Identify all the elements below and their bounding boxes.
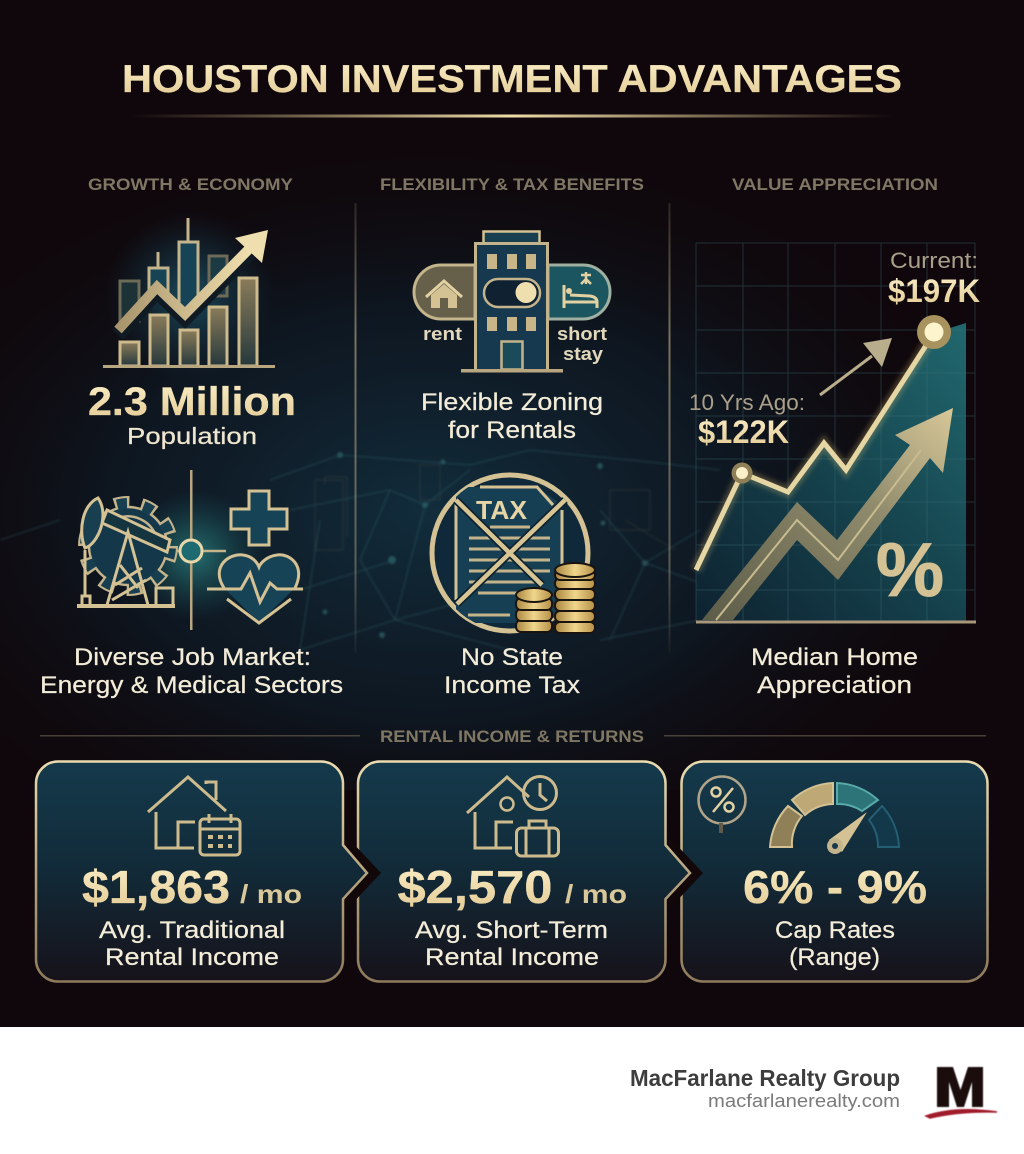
icon: short stay pill: short <box>557 324 607 344</box>
panel: cap rates card: (Range) <box>789 944 880 971</box>
panel: cap rates card <box>682 762 988 982</box>
icon: medical cross <box>231 491 287 545</box>
panel: traditional rental card: / mo <box>240 879 302 909</box>
data point: 10 years ago <box>732 462 752 484</box>
panel: traditional rental card <box>36 762 367 982</box>
text: diverse job market: Energy & Medical Sectors <box>40 672 343 699</box>
logo <box>926 1067 997 1118</box>
panel: short-term rental card: / mo <box>565 879 627 909</box>
label: ten years ago value: $122K <box>698 414 789 450</box>
text: flexible zoning: Flexible Zoning <box>421 389 603 416</box>
footer company name: MacFarlane Realty Group <box>630 1065 900 1091</box>
arrow: trend pointer <box>820 338 892 395</box>
text: median home appreciation: Median Home <box>751 644 918 671</box>
icon: heart with pulse <box>207 555 303 623</box>
icon: percent badge <box>698 776 746 833</box>
label: current value: Current: <box>890 248 978 273</box>
icon: no tax document with coins <box>432 475 595 633</box>
label: current value <box>888 248 980 309</box>
footer website: macfarlanerealty.com <box>708 1090 900 1111</box>
icon: short stay pill: stay <box>563 344 603 364</box>
icon: rent pill <box>414 265 475 344</box>
footer band <box>0 1027 1024 1154</box>
icon: flexible zoning building <box>414 232 610 372</box>
section heading: growth and economy: GROWTH & ECONOMY <box>88 175 294 194</box>
icon: skyline growth chart <box>103 210 275 380</box>
stat: population <box>88 380 296 449</box>
icon: energy and medical <box>77 470 303 630</box>
panel: traditional rental card: $1,863 <box>82 861 230 913</box>
title: HOUSTON INVESTMENT ADVANTAGES <box>122 58 902 101</box>
background network pattern <box>0 450 720 650</box>
text: median home appreciation: Appreciation <box>757 672 912 699</box>
text: median home appreciation <box>751 644 918 699</box>
data point: current <box>917 315 951 349</box>
stat: population: 2.3 Million <box>88 380 296 424</box>
panel: cap rates card: 6% - 9% <box>743 861 927 913</box>
line chart: median home appreciation <box>689 243 980 624</box>
section heading: flexibility and tax benefits: FLEXIBILITY & TAX BENEFITS <box>380 175 644 194</box>
percent sign: % <box>876 528 944 613</box>
text: no state income tax <box>444 644 580 699</box>
text: flexible zoning <box>421 389 603 444</box>
icon: no tax document with coins: TAX <box>476 495 528 525</box>
text: no state income tax: Income Tax <box>444 672 580 699</box>
icon: gauge <box>770 783 899 854</box>
text: no state income tax: No State <box>461 644 563 671</box>
arrow: card two to card three <box>660 839 703 907</box>
panel: short-term rental card: $2,570 <box>398 861 552 913</box>
panel: short-term rental card: Avg. Short-Term <box>415 917 608 944</box>
text: flexible zoning: for Rentals <box>448 417 576 444</box>
icon: rent pill: rent <box>423 324 462 344</box>
label: ten years ago value: 10 Yrs Ago: <box>689 390 805 415</box>
icon: gear <box>84 502 172 590</box>
arrow: card one to card two <box>340 839 381 907</box>
section heading: value appreciation: VALUE APPRECIATION <box>732 175 938 194</box>
icon: house with calendar <box>148 777 240 855</box>
panel: cap rates card: Cap Rates <box>775 917 895 944</box>
panel: traditional rental card: Rental Income <box>105 944 279 971</box>
panel: traditional rental card: Avg. Traditional <box>99 917 285 944</box>
icon: short stay pill <box>548 265 610 364</box>
text: diverse job market: Diverse Job Market: <box>74 644 311 671</box>
icon: house with clock and suitcase <box>467 776 558 856</box>
label: ten years ago value <box>689 390 805 450</box>
text: diverse job market <box>40 644 343 699</box>
panel: short-term rental card: Rental Income <box>425 944 599 971</box>
title underline <box>130 114 894 118</box>
stat: population: Population <box>127 423 257 449</box>
section heading: rental income and returns: RENTAL INCOME & RETURNS <box>380 727 644 746</box>
label: current value: $197K <box>888 273 980 309</box>
icon: coin stacks <box>516 563 595 633</box>
big zigzag arrow <box>702 408 953 620</box>
panel: short-term rental card <box>358 762 690 982</box>
icon: oil pump <box>77 498 175 606</box>
